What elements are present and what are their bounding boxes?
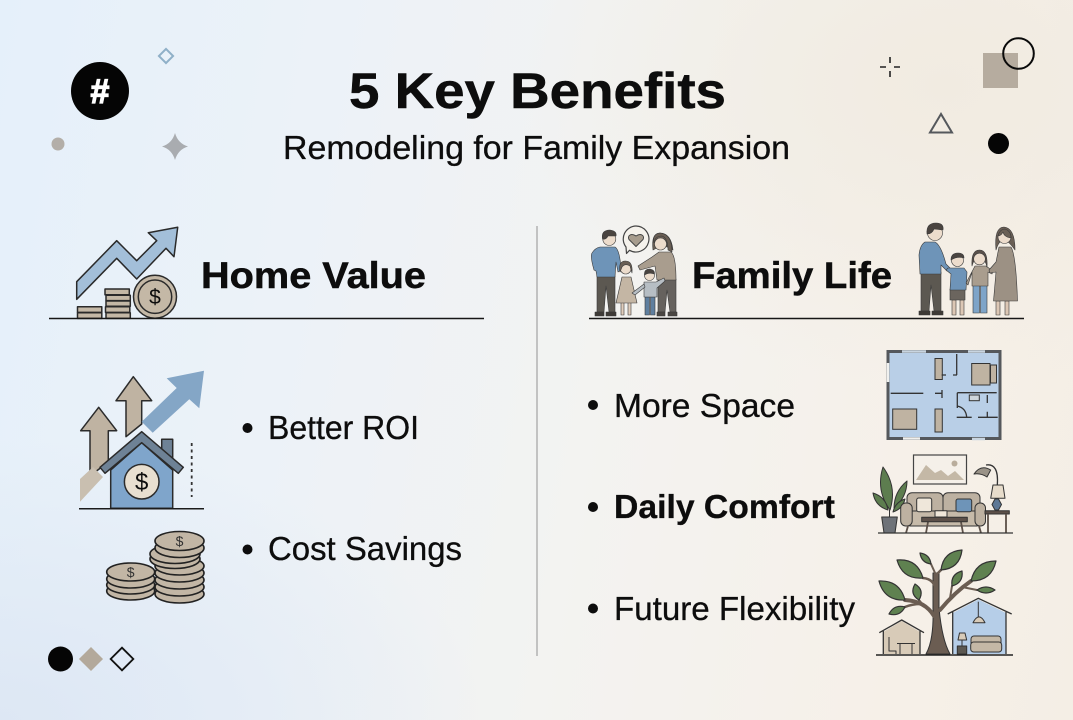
icon: rising chart and coins [77,227,178,318]
panel: home value [49,227,484,603]
list: home value benefits [242,409,462,567]
list: home value benefits: Cost Savings [268,530,462,567]
icon: hash badge: # [91,73,110,111]
heading: family life: Family Life [692,255,892,296]
icon: family with speech bubble [591,226,677,316]
center divider [536,226,538,656]
heading: home value: Home Value [201,255,426,296]
list: family life benefits [588,387,856,627]
subtitle: Remodeling for Family Expansion [283,129,790,166]
heading rule [589,318,1024,320]
icon: floor plan [888,352,1000,439]
decorative shapes top right [880,38,1034,154]
heading rule [49,318,484,320]
list: family life benefits: Daily Comfort [614,488,835,525]
icon: tree and houses [876,550,1013,655]
icon: house with growth arrows: $ [135,469,148,496]
decorative shapes top left [52,49,188,160]
list: family life benefits: More Space [614,387,795,424]
icon: coin stacks [107,532,204,603]
title: 5 Key Benefits [349,63,726,119]
decorative shapes bottom left [48,646,133,672]
icon: coin stacks: $ [127,564,135,580]
icon: family holding hands [919,223,1018,315]
list: family life benefits: Future Flexibility [614,590,856,627]
icon: hash badge [71,62,129,120]
icon: house with growth arrows [79,371,204,509]
list: home value benefits: Better ROI [268,409,419,446]
panel: family life [588,223,1024,655]
icon: living room [873,455,1013,533]
icon: rising chart and coins: $ [149,286,161,309]
icon: coin stacks: $ [176,533,184,549]
